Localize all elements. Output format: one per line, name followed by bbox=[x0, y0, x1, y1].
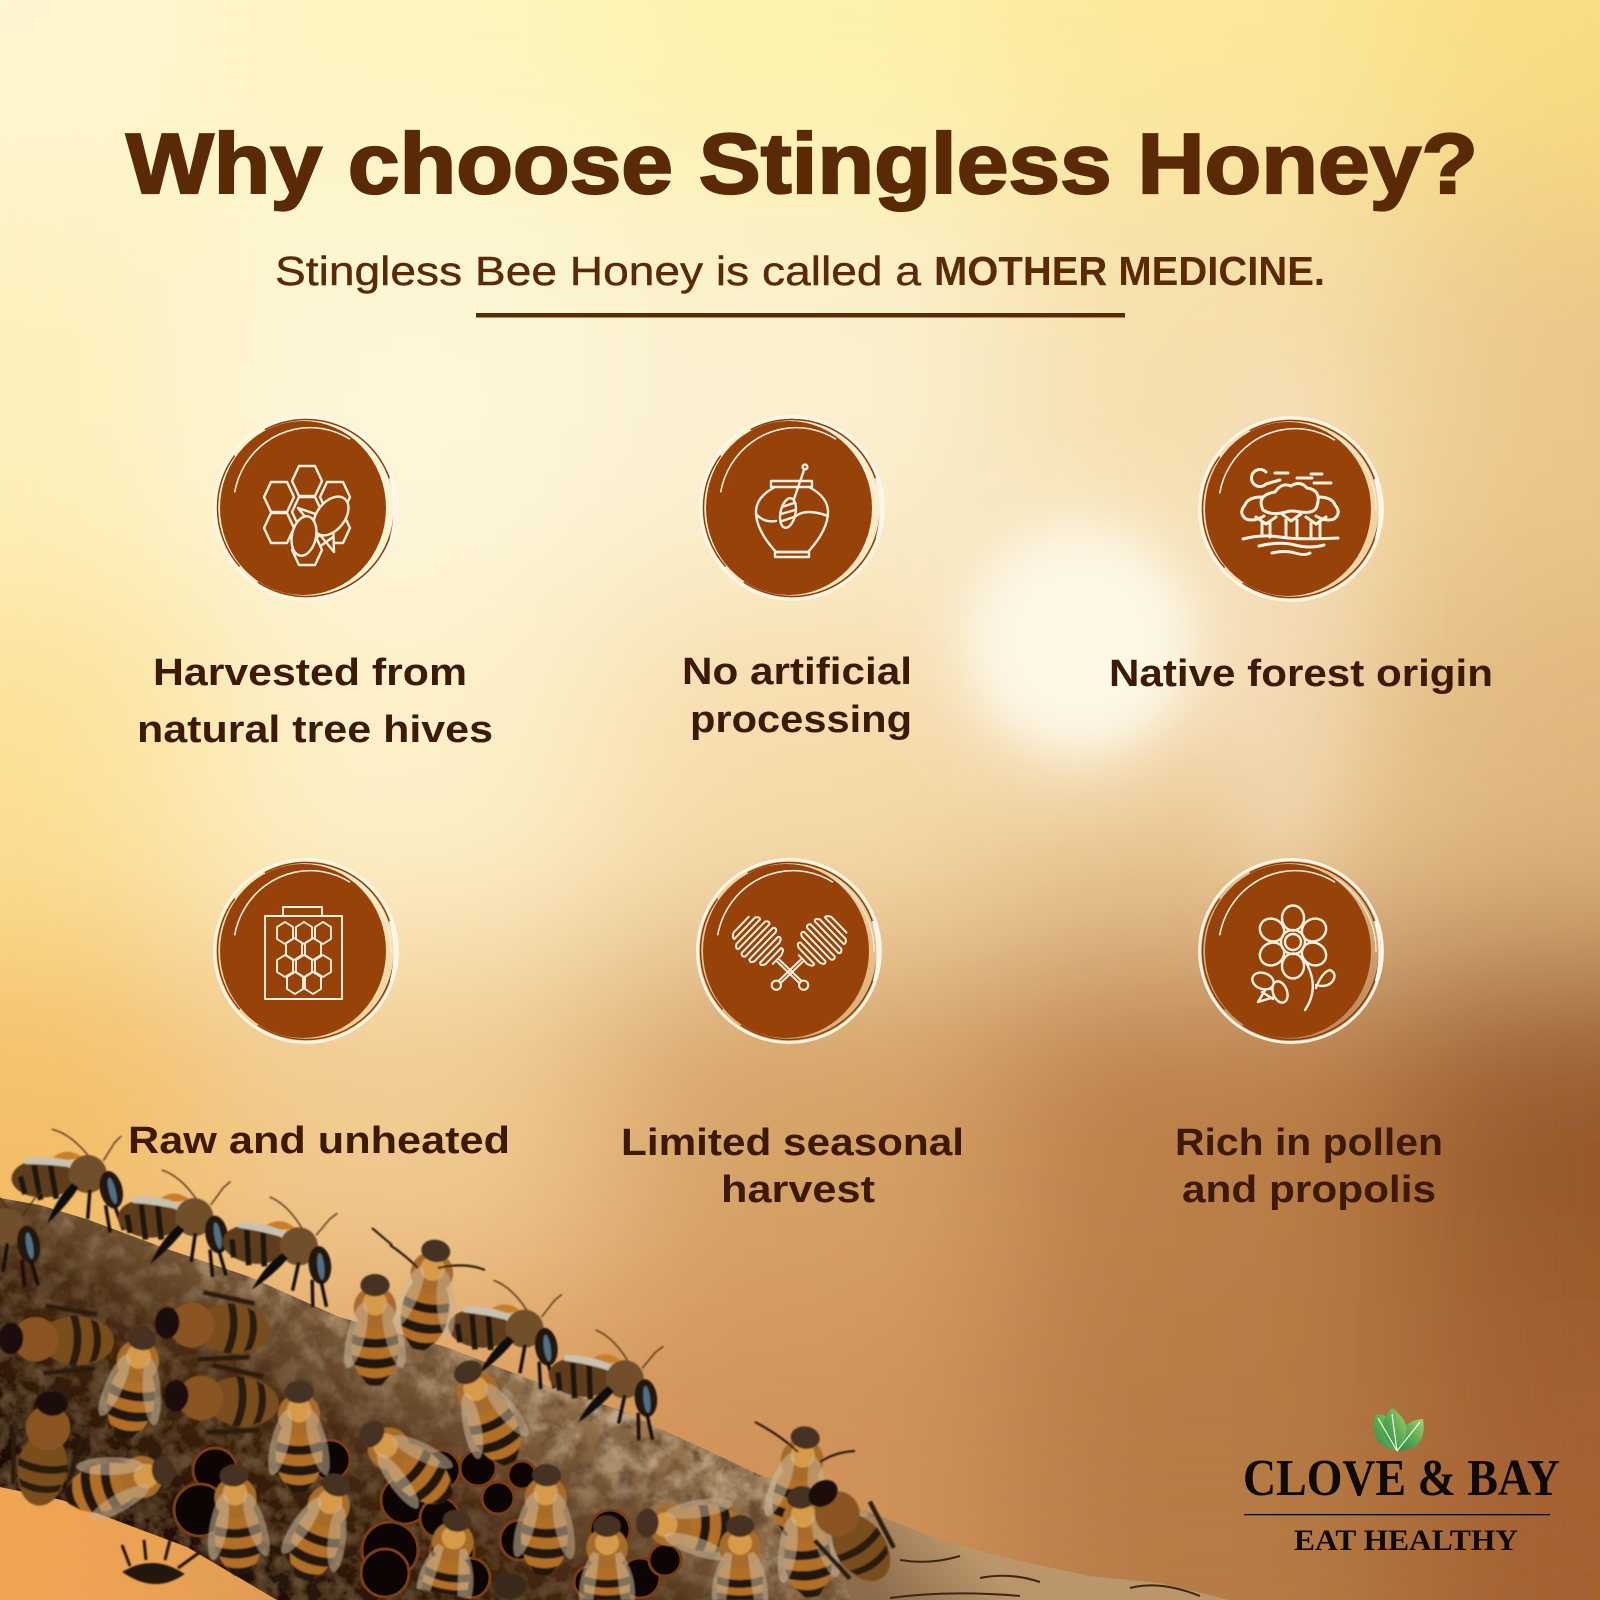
label: Rich in pollen bbox=[1175, 1122, 1443, 1164]
label: Raw and unheated bbox=[128, 1120, 510, 1162]
subtitle with underline bbox=[275, 248, 1325, 318]
icon: crossed honey dippers bbox=[673, 835, 905, 1067]
panel: native forest origin bbox=[1109, 393, 1493, 695]
brand name: CLOVE & BAY bbox=[1243, 1450, 1560, 1507]
icon: flower and bee bbox=[1175, 835, 1407, 1067]
label: Limited seasonal bbox=[621, 1122, 964, 1164]
icon: honeycomb frame bbox=[190, 835, 422, 1067]
icon: forest trees bbox=[1175, 393, 1407, 625]
honeycomb cells bbox=[174, 1440, 681, 1598]
panel: no artificial processing bbox=[676, 392, 912, 741]
label: Native forest origin bbox=[1109, 653, 1493, 695]
worker bees on ridge bbox=[0, 1129, 855, 1542]
panel: limited seasonal harvest bbox=[621, 835, 964, 1211]
title: Why choose Stingless Honey? bbox=[126, 117, 1478, 212]
subtitle with underline: MOTHER MEDICINE. bbox=[934, 248, 1325, 294]
label line two: natural tree hives bbox=[137, 709, 493, 751]
tagline: EAT HEALTHY bbox=[1294, 1524, 1518, 1557]
bees on a tree branch with honeycomb bbox=[0, 1129, 1230, 1600]
icon: green leaves bbox=[1374, 1408, 1424, 1451]
label line two: and propolis bbox=[1182, 1169, 1436, 1211]
icon: honeycomb and bee bbox=[190, 392, 422, 624]
subtitle with underline: Stingless Bee Honey is called a bbox=[275, 248, 921, 294]
panel: rich in pollen and propolis bbox=[1175, 835, 1443, 1211]
panel: harvested from natural tree hives bbox=[137, 392, 493, 751]
icon: honey jar with dipper bbox=[676, 392, 908, 624]
worker bees on comb bbox=[0, 1288, 910, 1600]
label: No artificial bbox=[682, 651, 912, 693]
panel: raw and unheated bbox=[128, 835, 510, 1162]
label: Harvested from bbox=[153, 652, 467, 694]
label line two: processing bbox=[690, 699, 912, 741]
label line two: harvest bbox=[721, 1169, 875, 1211]
branch bark bbox=[0, 1198, 1230, 1600]
brand logo bbox=[1243, 1408, 1560, 1557]
